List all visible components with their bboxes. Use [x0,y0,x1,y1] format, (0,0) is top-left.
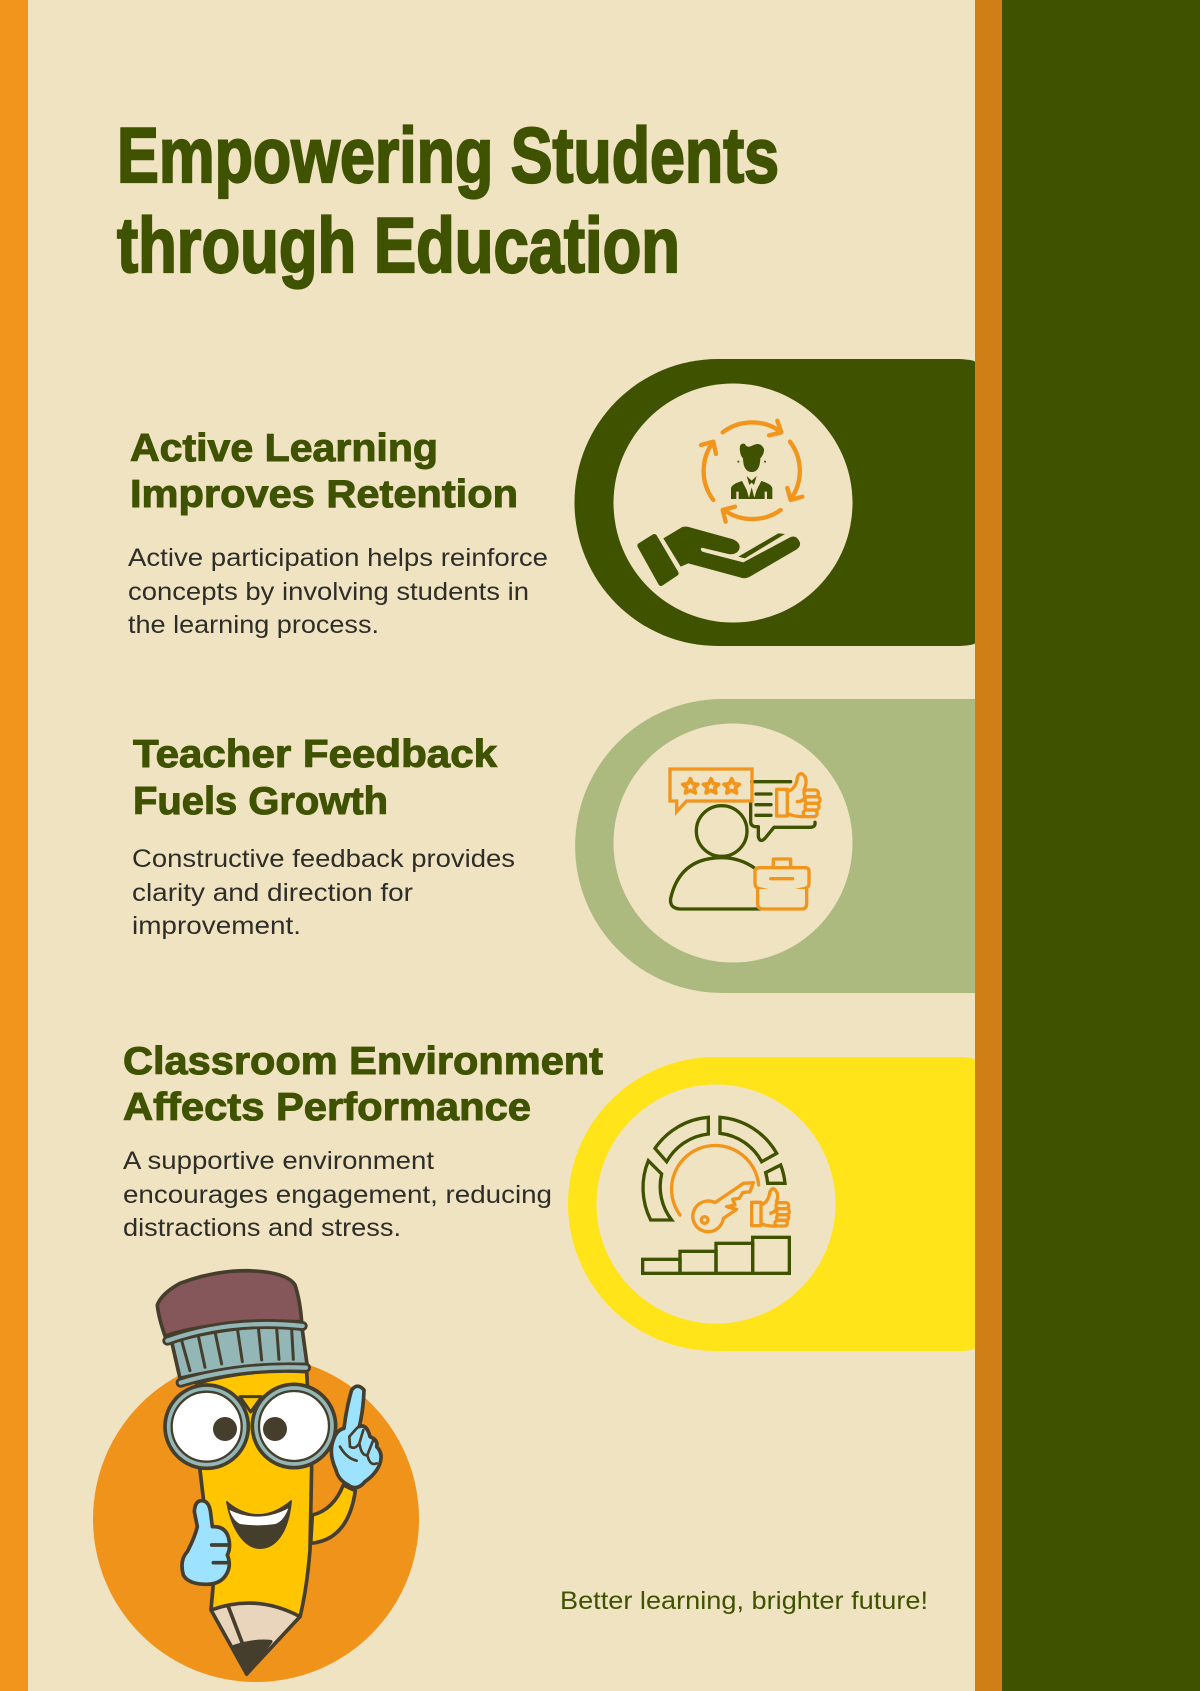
title: Empowering Students [117,111,779,199]
panel: card 2 background [575,699,975,993]
heading: active learning: Improves Retention [130,473,518,516]
body: teacher feedback [132,845,515,940]
body: teacher feedback: clarity and direction for [132,879,413,907]
icon: person with rating and feedback [614,724,852,962]
body: classroom environment: A supportive environment [123,1147,434,1175]
panel: card 3 background [568,1057,975,1351]
body: active learning: the learning process. [128,611,379,639]
body: classroom environment [123,1147,552,1242]
heading: classroom environment [123,1040,603,1129]
heading: teacher feedback: Fuels Growth [133,780,388,823]
heading: classroom environment: Classroom Environment [123,1040,603,1083]
mascot: pencil character [157,1271,381,1674]
body: teacher feedback: Constructive feedback provides [132,845,515,873]
title: through Education [117,201,680,289]
mascot circle [93,1356,419,1682]
section 3 text [123,1040,603,1242]
panel: card 1 background [574,359,975,646]
heading: active learning [130,427,518,516]
icon: hand holding person with cycle arrows [614,384,852,622]
footer tagline: Better learning, brighter future! [560,1587,928,1615]
title [117,111,779,289]
section 1 text [128,427,548,639]
heading: classroom environment: Affects Performance [123,1086,531,1129]
right green band [1002,0,1200,1691]
body: active learning [128,544,548,639]
body: active learning: Active participation helps reinforce [128,544,548,572]
right brown stripe [975,0,1002,1691]
heading: teacher feedback [133,733,497,823]
icon: gauge with key and steps [596,1084,836,1324]
body: classroom environment: encourages engagement, reducing [123,1181,552,1209]
heading: teacher feedback: Teacher Feedback [133,733,497,776]
body: active learning: concepts by involving students in [128,578,529,606]
left orange band [0,0,28,1691]
body: teacher feedback: improvement. [132,912,301,940]
heading: active learning: Active Learning [130,427,438,470]
section 2 text [132,733,515,940]
body: classroom environment: distractions and stress. [123,1214,401,1242]
